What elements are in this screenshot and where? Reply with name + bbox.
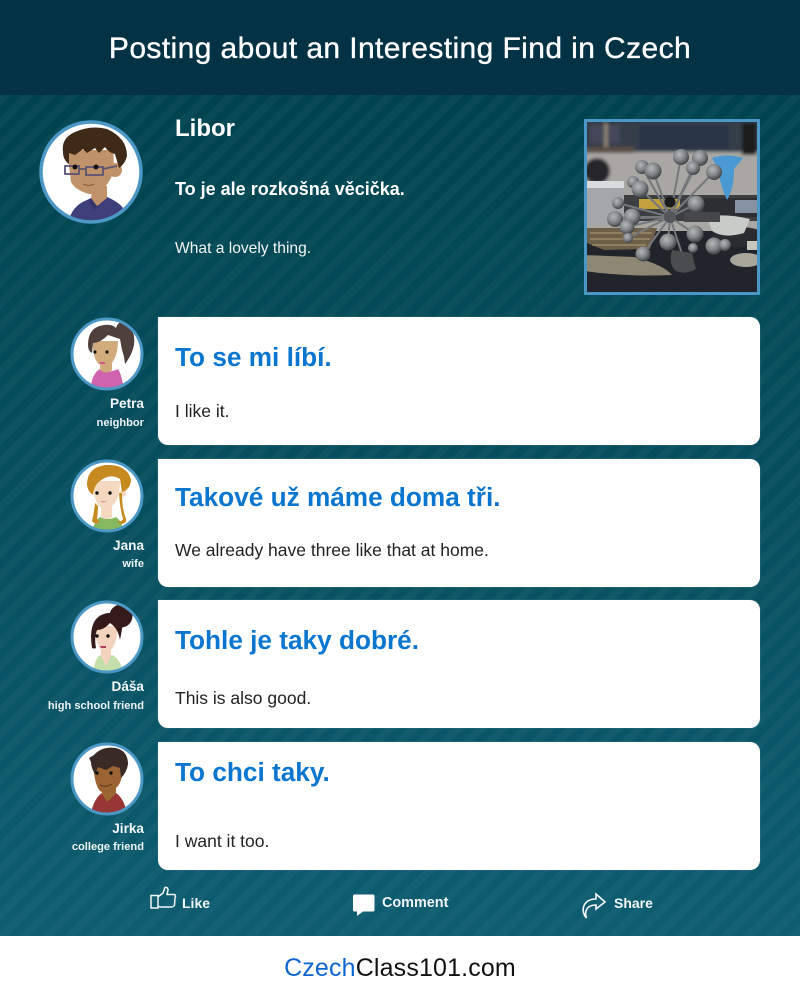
label: Share: [614, 895, 653, 911]
comment row: Dáša: [48, 600, 760, 728]
photo: [584, 119, 760, 295]
relation: neighbor: [97, 417, 144, 429]
comment row: Petra: [70, 316, 760, 446]
avatar: Jana: [70, 460, 144, 532]
name: Petra: [110, 396, 144, 411]
action: Like: [150, 886, 210, 911]
comment Czech: To chci taky.: [175, 757, 330, 787]
comment card: [158, 317, 760, 445]
label: Like: [182, 895, 210, 911]
avatar: Jirka: [70, 742, 144, 816]
action: Comment: [353, 894, 448, 916]
relation: wife: [122, 558, 144, 570]
title bar: [0, 0, 800, 95]
icon: speech bubble: [353, 894, 374, 916]
name: Dáša: [112, 679, 144, 694]
title: Posting about an Interesting Find in Czech: [109, 32, 691, 65]
action: Share: [582, 892, 653, 918]
post text English: What a lovely thing.: [175, 240, 311, 257]
comment Czech: To se mi líbí.: [175, 342, 332, 372]
comment English: I want it too.: [175, 831, 269, 851]
avatar: Petra: [70, 318, 144, 390]
comment English: I like it.: [175, 401, 229, 421]
comment card: [158, 742, 760, 870]
post text Czech: To je ale rozkošná věcička.: [175, 179, 405, 199]
footer logo: CzechClass101.com: [284, 954, 516, 982]
icon: share arrow: [582, 892, 606, 918]
name: Jana: [113, 538, 144, 553]
name: Jirka: [112, 821, 144, 836]
relation: high school friend: [48, 700, 144, 712]
comment row: Jana: [70, 458, 760, 588]
icon: thumbs up: [150, 886, 176, 909]
comment English: This is also good.: [175, 688, 311, 708]
comment English: We already have three like that at home.: [175, 540, 489, 560]
comment card: [158, 600, 760, 728]
avatar: Libor: [39, 120, 143, 224]
avatar: Dáša: [70, 600, 144, 674]
comment Czech: Tohle je taky dobré.: [175, 625, 419, 655]
comment Czech: Takové už máme doma tři.: [175, 482, 501, 512]
comment card: [158, 459, 760, 587]
comment row: Jirka: [70, 742, 760, 870]
poster name: Libor: [175, 115, 235, 142]
relation: college friend: [72, 841, 144, 853]
label: Comment: [382, 895, 448, 911]
